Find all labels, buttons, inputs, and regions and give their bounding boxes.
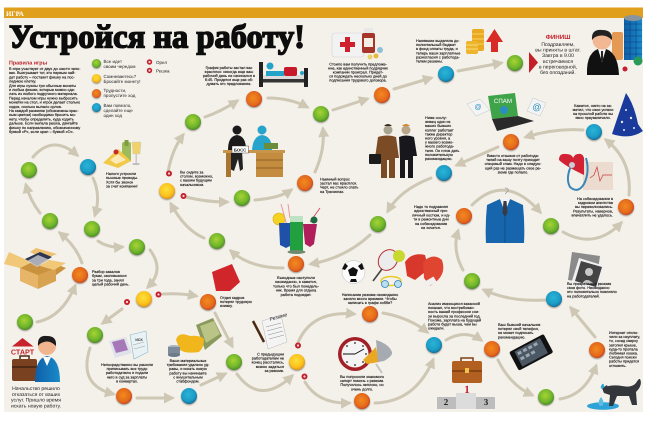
text: acquaintance: Вы попросили знакомого xyxy=(340,375,384,379)
text: finish: Завтра в 9.00 xyxy=(542,53,574,59)
text: start: искать новую работу. xyxy=(11,403,61,409)
icon: cardboard box xyxy=(4,248,66,289)
text: budget: теперь ваши зарплатные xyxy=(416,51,460,55)
icon: resume sheet xyxy=(253,312,288,349)
text: finish xyxy=(535,34,581,76)
icon: podium xyxy=(437,384,495,409)
text: spam: телей на вашу почту приходит xyxy=(486,158,540,162)
text block: rules body: лать из любого подручного материала. xyxy=(9,92,78,96)
icon: smartphone xyxy=(509,334,553,371)
text: suit: на собеседование xyxy=(415,222,447,226)
text: vacancy analysis: Анализ имеющихся вакансий xyxy=(428,302,480,306)
text: contractor: ся подождать несколько дней до xyxy=(329,74,387,78)
text: vacancy analysis: показал, что востребован- xyxy=(428,306,475,310)
text: colleague: ного уровня, а xyxy=(425,136,451,140)
header bar: ИГРА xyxy=(6,11,24,18)
text: colleague: рекомендацию. xyxy=(425,157,452,161)
text: schedule: думать это предложение. xyxy=(207,82,251,86)
title: Устройся на работу! xyxy=(9,20,305,56)
text: lost record book: книжку. xyxy=(220,304,233,308)
icon: laptop and spam envelopes: @ xyxy=(532,102,542,112)
text: photo: свое фото. Неожиданно xyxy=(567,286,609,290)
text: internet cut: затопил крыше, xyxy=(609,343,637,347)
legend: своим чередом xyxy=(104,64,135,69)
text: lost record book: потерял трудовую xyxy=(220,300,252,304)
icon: laptop and spam envelopes: @ xyxy=(474,103,482,111)
text: colleague: коллег работает xyxy=(425,128,454,132)
text: suit: личный костюм, и ид- xyxy=(412,213,451,217)
text: seated with boss: начальником. xyxy=(180,183,204,187)
text: acquaintance: Получилось неплохо, но xyxy=(340,383,384,387)
icon: briefcase xyxy=(452,358,482,383)
text block: rules body: фишку по направлению, обозначенному xyxy=(9,126,80,130)
text: farewell: за счет компании! xyxy=(106,185,138,189)
fork markers xyxy=(124,170,308,380)
text: internet cut: любимая кошка. xyxy=(609,352,638,356)
text: colleague: жного работода- xyxy=(425,145,455,149)
icon: podium: 3 xyxy=(484,397,489,407)
legend: пропустите ход xyxy=(104,93,136,98)
icon: cat in puddle xyxy=(587,379,641,410)
legend: Бросайте монету! xyxy=(104,79,141,84)
text: suit: не хочется. xyxy=(421,226,441,230)
text: colleague: у вашего возмо- xyxy=(425,141,454,145)
text: contractor: ние, как единственный подрядчик xyxy=(328,66,388,70)
legend: один ход xyxy=(104,113,122,118)
text: schedule: врасплох: никогда еще ваш xyxy=(205,70,253,74)
text: farewell: Хотя бы звонок xyxy=(106,180,133,184)
text: interview: На собеседовании в xyxy=(577,197,613,201)
text: vacancy analysis: работе будет выше, чем вы xyxy=(428,322,477,326)
text: weekend: работа подождет. xyxy=(281,293,311,297)
text: clearing backlog: Разбор завалов xyxy=(92,270,120,274)
icon: boss at desk xyxy=(223,126,285,177)
icon: boss at desk: БОСС xyxy=(234,148,246,152)
panel: rules of the game xyxy=(9,60,81,134)
text: suit: единственный при- xyxy=(414,209,449,213)
text: exaggerated: на прошлой работе вы xyxy=(573,112,613,116)
text: vacancy analysis: ность вашей профессии сни- xyxy=(428,310,480,314)
text: suit: ти в ремонтные дни xyxy=(413,218,449,222)
legend: Решка xyxy=(156,68,170,74)
icon: laptop and spam envelopes: СПАМ xyxy=(494,98,512,105)
text: budget: в фонд оплаты труда, и xyxy=(416,47,458,51)
text: contractor: компании проиграл. Придет- xyxy=(333,70,384,74)
text: seated with boss: Вы сидите за xyxy=(180,170,204,174)
text: lawsuit: него в суд за зарплаты xyxy=(107,375,147,379)
text: previous employer: С предыдущим xyxy=(257,352,284,356)
text: vacancy analysis: Похоже, зарплата на будущей xyxy=(428,318,481,322)
text: severance: Ваши материальные xyxy=(170,359,206,363)
text block: rules body: и любые фишки, которые можно сде- xyxy=(9,88,76,92)
legend: Орел xyxy=(156,60,167,65)
text: severance: стабфондом. xyxy=(176,380,200,384)
text block: rules body: На каждой развилке (обозначены крас- xyxy=(9,109,79,113)
text: budget: разногласия с работода- xyxy=(416,55,460,59)
text: finish: вы приняты в штат. xyxy=(535,48,581,54)
text: photo: на работодателей. xyxy=(567,294,600,298)
text: acquaintance: очень долго. xyxy=(351,387,373,391)
text: lawsuit: приписывать все трудо xyxy=(107,367,147,371)
text: question: Черт, не стоило спать xyxy=(320,186,358,190)
text: severance: с внушительным xyxy=(173,375,203,379)
legend xyxy=(92,59,170,118)
text: schedule: рабочий день не начинался в xyxy=(203,74,255,78)
legend: Сомневаетесь? xyxy=(104,74,137,79)
text: internet cut: работы придется xyxy=(609,360,639,364)
text: exaggerated: явно преувеличили. xyxy=(575,116,611,120)
icon: clock and megaphone xyxy=(338,337,392,373)
text: phone: рекомендацию. xyxy=(498,335,525,339)
text: weekend: ник. Время для отдыха xyxy=(276,289,317,293)
text: colleague: теля. Он готов дать xyxy=(425,149,459,153)
icon: heart and stethoscope xyxy=(559,154,613,190)
text: contractor: подписания трудового договора. xyxy=(329,78,387,82)
text: schedule: 6:45. Придется еще раз об- xyxy=(205,78,254,82)
icon: sports equipment xyxy=(342,246,443,288)
path nodes xyxy=(17,55,634,409)
text: colleague: живец один из xyxy=(425,120,451,124)
text block: rules body: буквой «Р», если орел – буквой «О». xyxy=(9,130,74,134)
heading: rules: Правила игры xyxy=(9,60,48,66)
icon: podium: 1 xyxy=(464,384,470,396)
icon: resume sheet: Резюме xyxy=(269,312,288,323)
text: contractor: Стоило вам получить предложе- xyxy=(329,62,388,66)
icon: finish businessman and building xyxy=(587,15,642,75)
text block: rules body: Для игры нужны три обычные монеты xyxy=(9,84,76,88)
icon: wizard hat xyxy=(612,93,643,136)
icon: money and document xyxy=(109,331,148,359)
text: vacancy analysis: зи выросла за последний год. xyxy=(428,314,481,318)
legend: Трудности, xyxy=(104,88,126,93)
text block: rules body: дальше. Если выпала решка, двигайте xyxy=(9,122,78,126)
text: interview: впечатлить не удалось. xyxy=(572,213,613,217)
text block: rules body: дет работу – поставит фишку на пос- xyxy=(9,75,75,79)
text block: rules body: ным цветом) необходимо бросить мо- xyxy=(9,113,77,117)
text: weekend: неожиданно, в кажется, xyxy=(275,280,317,284)
text: severance: равы, и искать новую xyxy=(169,367,207,371)
text: start: отказаться от ваших xyxy=(12,392,61,398)
text: clearing backlog: за три года, занял xyxy=(92,278,124,282)
text: spam: щий раз не размещать свое ре- xyxy=(485,166,542,170)
text: colleague: положительную xyxy=(425,153,453,157)
text: budget: полнительный бюджет xyxy=(416,43,456,47)
text: budget: телем решены. xyxy=(416,60,443,64)
text: suit: Надо то подравнял xyxy=(414,205,448,209)
text: previous employer: можно задаться xyxy=(256,365,284,369)
text: finish: без опозданий. xyxy=(540,70,576,76)
icon: cocktails xyxy=(273,204,320,254)
text: internet cut: Сегодня поиски xyxy=(609,356,637,360)
text: phone: потерял свой телефон, xyxy=(498,327,539,331)
legend: Все идет xyxy=(104,59,122,64)
text: question: на Тренингах. xyxy=(320,190,344,194)
text: internet cut: куда-то пропала xyxy=(609,347,639,351)
text: seated with boss: с вашим будущим xyxy=(180,179,212,183)
text block: rules body: Перед началом игры нужно выбросить xyxy=(9,96,78,100)
icon: start person xyxy=(12,336,60,382)
text: interview: вы переволновались. xyxy=(575,205,613,209)
text block: rules body: В игре участвует от двух до шести чело- xyxy=(9,67,81,71)
text: farewell: Налоги устроили xyxy=(106,172,136,176)
text: start: Начальство решило xyxy=(12,386,60,392)
text: farewell: пышные проводы. xyxy=(106,176,138,180)
text: schedule: График работы застал вас xyxy=(206,66,252,70)
text: finish: в переговорной, xyxy=(539,64,577,70)
text: colleague: также директор xyxy=(425,132,452,136)
start label: СТАРТ xyxy=(11,348,35,356)
text: hobbies: написать в графе хобби? xyxy=(348,301,392,305)
text: finish: Поздравляем, xyxy=(541,42,575,48)
text: colleague: Ниже сослу- xyxy=(425,116,448,120)
text: finish: встречаемся xyxy=(543,59,573,65)
text: hobbies: Написание резюме неожиданно xyxy=(342,293,398,297)
text: photo: это положительно повлияло xyxy=(567,290,617,294)
text: previous employer: конец расстались, xyxy=(252,361,284,365)
text: question: застал вас врасплох. xyxy=(320,182,357,186)
text: weekend: Выходные наступили xyxy=(277,276,315,280)
text: phone: Ваш бывший начальник xyxy=(498,323,541,327)
text: phone: не может подписать xyxy=(498,331,533,335)
text: question: Наемный вопрос xyxy=(320,178,350,182)
text: finish: ФИНИШ xyxy=(546,34,570,41)
text: interview: Результаты, наверное, xyxy=(573,209,613,213)
text: budget: Нанявшие выделяла до- xyxy=(416,39,460,43)
text: previous employer: работодателем не xyxy=(252,357,284,361)
text: severance: требования удалено уд- xyxy=(167,363,210,367)
text: internet cut: чили за неуплату, xyxy=(609,335,640,339)
text: hobbies: заняло много времени. Чтобы xyxy=(343,297,397,301)
text block: rules body: век. Выигрывает тот, кто первым най- xyxy=(9,71,76,75)
header bar xyxy=(4,8,643,18)
text: vacancy analysis: ожидали. xyxy=(428,327,444,331)
text: previous employer: за резюме. xyxy=(265,369,284,373)
text: interview: кадровом агентстве xyxy=(578,201,613,205)
text block: rules body: леднюю клетку. xyxy=(9,80,36,84)
icon: farewell food xyxy=(103,140,141,168)
icon: gold bag, coins, cash xyxy=(168,318,222,357)
icon: suit jacket on hanger xyxy=(486,188,524,243)
text: exaggerated: метил, что свои успехи xyxy=(573,108,613,112)
text: spam: зюме где попало. xyxy=(498,170,528,174)
text: acquaintance: сапорт помочь с резюме. xyxy=(340,379,384,383)
text block: rules body: ходов, сколько выпало орлов. xyxy=(9,105,62,109)
text: lawsuit: в конвертах. xyxy=(116,379,138,383)
legend: сделайте еще xyxy=(104,108,133,113)
text: clearing backlog: бумаг, скопившихся xyxy=(92,274,127,278)
finish marker triangle xyxy=(529,52,538,73)
text: severance: работу вы начинаете xyxy=(169,371,207,375)
text: spam: спецовый спам. Надо в следую- xyxy=(485,162,542,166)
start label xyxy=(11,338,35,356)
icon: laptop and spam envelopes xyxy=(467,93,546,131)
text: photo: Вы прекратили и резюме xyxy=(567,282,611,286)
text block: rules body: монетки на стол, и игрок делает столько xyxy=(9,101,80,105)
icon: two men in suits xyxy=(369,124,417,178)
icon: money and document: ИСК xyxy=(135,338,143,342)
text block: rules body: нету, чтобы определить, куда ходить xyxy=(9,117,74,121)
text: lawsuit: работодателю и подали xyxy=(106,371,148,375)
text: weekend: только что был понедель- xyxy=(273,284,320,288)
path arrows xyxy=(26,63,629,403)
text: internet cut: отложить. xyxy=(609,364,626,368)
text: seated with boss: столом, возможно, xyxy=(180,175,213,179)
legend: Вам повезло, xyxy=(104,103,131,108)
text: lawsuit: Непосредственно вы решили xyxy=(101,363,153,367)
text: clearing backlog: целый рабочий день. xyxy=(92,283,129,287)
text: spam: Вместо отзывов от работода- xyxy=(487,154,540,158)
text: start: услуг. Пришло время xyxy=(11,398,61,404)
icon: podium: 2 xyxy=(444,397,449,407)
icon: hospital bed xyxy=(259,62,308,87)
text: internet cut: Интернет отклю- xyxy=(609,331,639,335)
icon: red work record book xyxy=(212,264,240,291)
text: lost record book: Отдел кадров xyxy=(220,296,244,300)
icon: first aid kit xyxy=(332,28,383,60)
icon: photo xyxy=(568,252,605,292)
icon: coins and red arrow xyxy=(466,29,503,54)
text: colleague: ваших бывших xyxy=(425,124,451,128)
text: internet cut: то, сосед сверху xyxy=(609,339,638,343)
text: exaggerated: Кажется, никто не за- xyxy=(574,104,613,108)
